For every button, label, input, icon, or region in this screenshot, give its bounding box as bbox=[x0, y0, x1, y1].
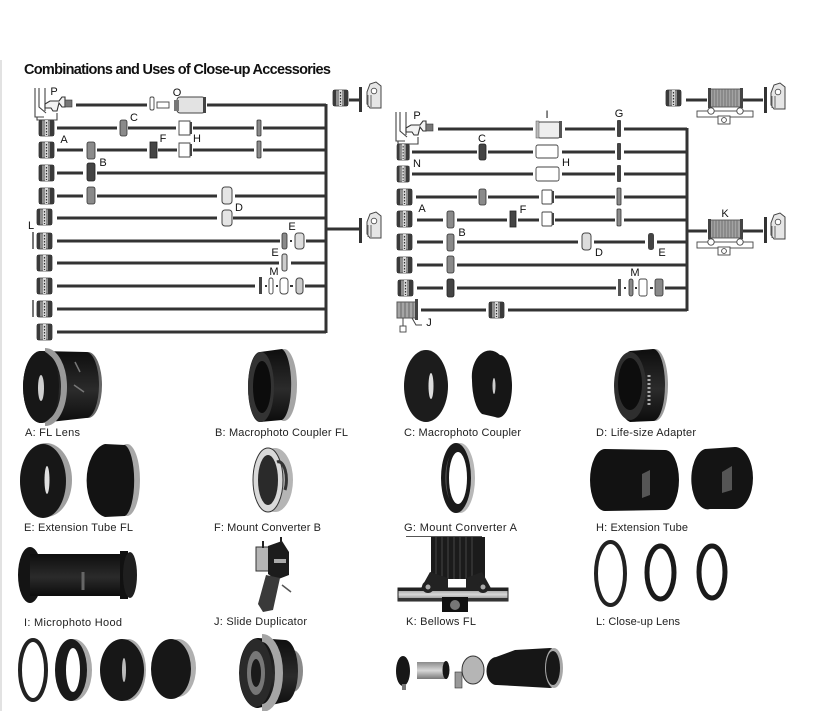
photo J: slide duplicator bbox=[256, 537, 291, 612]
key letters right chart: I bbox=[545, 109, 549, 121]
row 9: J slide duplicator and lens bbox=[397, 299, 687, 332]
row 7 bbox=[32, 232, 326, 249]
key letters right chart: M bbox=[630, 267, 640, 279]
row 2 bbox=[39, 120, 326, 136]
key letters right chart: C bbox=[478, 133, 486, 145]
photo E: extension tube FL pair bbox=[20, 443, 140, 518]
caption E: E: Extension Tube FL bbox=[24, 522, 133, 534]
photo O: microscope adapter parts bbox=[396, 648, 563, 690]
row 11 bbox=[37, 324, 326, 340]
caption C: C: Macrophoto Coupler bbox=[404, 427, 521, 439]
photo H: extension tube pair bbox=[590, 447, 753, 511]
row 4 bbox=[39, 163, 326, 181]
key letters right chart: J bbox=[426, 317, 432, 329]
key letters right chart: E bbox=[658, 247, 666, 259]
key letters right chart: P bbox=[413, 110, 421, 122]
key letters left chart: A bbox=[60, 134, 68, 146]
key letters right chart: B bbox=[458, 227, 466, 239]
caption H: H: Extension Tube bbox=[596, 522, 688, 534]
key letters left chart: P bbox=[50, 86, 58, 98]
key letters right chart: G bbox=[615, 108, 623, 120]
photo B: macrophoto coupler FL bbox=[248, 349, 297, 422]
branch to camera body bbox=[326, 212, 381, 243]
top lens with bellows and camera bbox=[666, 83, 785, 124]
photo I: microphoto hood bbox=[18, 547, 137, 603]
photo G: mount converter A bbox=[441, 443, 475, 513]
caption B: B: Macrophoto Coupler FL bbox=[215, 427, 348, 439]
row 7 bbox=[397, 256, 687, 273]
row 10 bbox=[32, 300, 326, 317]
row 6 bbox=[397, 233, 687, 251]
caption L: L: Close-up Lens bbox=[596, 616, 680, 628]
top right lens and camera bbox=[333, 82, 381, 112]
key letters left chart: D bbox=[235, 202, 243, 214]
photo C: macrophoto coupler pair bbox=[404, 350, 512, 422]
row 6 bbox=[37, 209, 326, 226]
key letters left chart: M bbox=[269, 266, 279, 278]
key letters left chart: E bbox=[271, 247, 279, 259]
row 5 bbox=[397, 209, 687, 228]
photo D: life-size adapter bbox=[614, 349, 668, 422]
photo F: mount converter B bbox=[253, 448, 293, 512]
key letters left chart: H bbox=[193, 133, 201, 145]
key letters left chart: C bbox=[130, 112, 138, 124]
photo K: bellows FL bbox=[398, 536, 508, 612]
row 2 bbox=[397, 143, 687, 160]
caption I: I: Microphoto Hood bbox=[24, 617, 122, 629]
key letters left chart bbox=[28, 86, 296, 278]
diagram: right combination chart bbox=[396, 83, 785, 332]
key letters right chart: H bbox=[562, 157, 570, 169]
branch with bellows K and camera bbox=[687, 213, 785, 255]
row 8 bbox=[398, 279, 687, 297]
photo L: close-up lens rings bbox=[596, 542, 725, 605]
caption F: F: Mount Converter B bbox=[214, 522, 321, 534]
row 5 bbox=[39, 187, 326, 204]
key letters right chart: F bbox=[520, 204, 527, 216]
row 4 bbox=[397, 188, 687, 205]
caption G: G: Mount Converter A bbox=[404, 522, 518, 534]
row: P slide copier with O microscope adapter bbox=[35, 88, 326, 120]
photo M: four rings and tubes bbox=[20, 639, 196, 701]
caption K: K: Bellows FL bbox=[406, 616, 476, 628]
main vertical bus line bbox=[324, 104, 328, 333]
photo N: macro lens bbox=[239, 638, 303, 708]
main vertical bus line bbox=[686, 128, 688, 311]
key letters right chart: A bbox=[418, 203, 426, 215]
key letters right chart: K bbox=[721, 208, 729, 220]
scan edge shadow bbox=[0, 60, 2, 711]
title: Combinations and Uses of Close-up Accessories bbox=[24, 62, 331, 78]
caption D: D: Life-size Adapter bbox=[596, 427, 696, 439]
photo A: FL lens bbox=[23, 351, 102, 423]
key letters left chart: E bbox=[288, 221, 296, 233]
key letters right chart: D bbox=[595, 247, 603, 259]
key letters left chart: F bbox=[160, 133, 167, 145]
key letters right chart bbox=[413, 108, 729, 329]
key letters left chart: B bbox=[99, 157, 107, 169]
row 1: P, I, G bbox=[396, 112, 687, 144]
caption J: J: Slide Duplicator bbox=[214, 616, 307, 628]
diagram: left combination chart bbox=[28, 82, 381, 340]
row 3 bbox=[397, 165, 687, 182]
key letters left chart: L bbox=[28, 220, 34, 232]
row 8 bbox=[37, 254, 326, 271]
row 9 bbox=[37, 277, 326, 294]
row 3 bbox=[39, 141, 326, 159]
key letters right chart: N bbox=[413, 158, 421, 170]
caption A: A: FL Lens bbox=[25, 427, 80, 439]
key letters left chart: O bbox=[173, 87, 182, 99]
